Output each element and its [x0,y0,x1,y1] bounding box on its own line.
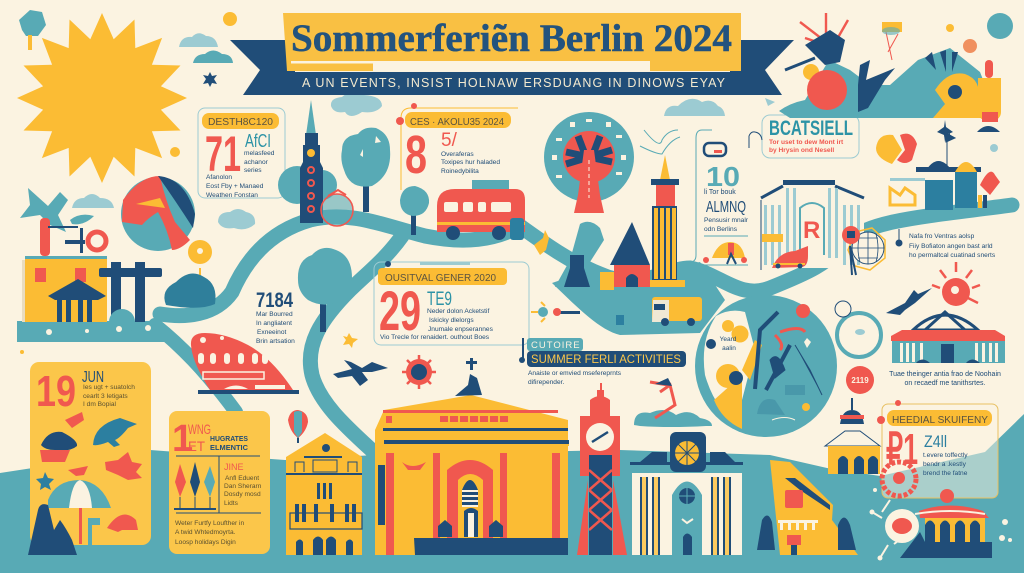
illustration: delivery van [616,297,702,326]
panel body text: t.evere toffectly [923,452,968,459]
icon: sun [17,13,187,183]
illustration: museum with red letter: R [803,217,820,244]
card: events list: Anfl Eduent [225,475,259,482]
icon: balloon [288,410,308,443]
text block: 7184: Brin artsation [256,338,295,345]
card heading: ET [188,438,205,454]
panel body text: Neder dolon Acketstif [427,308,489,315]
card: events list [169,411,270,554]
icon: yellow flower [188,240,212,284]
icon: star [343,333,358,348]
icon: globe with pin [842,226,885,275]
sub-number: Z4ll [924,432,947,451]
icon: magnifier ring [835,301,881,357]
panel heading: CES · AKOLU35 2024 [410,116,504,128]
panel: destinations [198,108,285,199]
big number 29: 29 [379,279,421,342]
subtitle band [283,72,733,95]
panel: almanac column: Pensusir mnalr [704,217,749,224]
panel body text: Roinedybilita [441,168,479,175]
panel: calendar 2024 [396,103,518,190]
illustration: small tree [400,186,429,235]
body text: dome note: on recaedf me tanithsrtes. [905,380,986,387]
panel body text: brend the fatne [923,470,968,477]
illustration: red bus [437,180,525,240]
icon: red wheel [321,190,353,226]
river bank left [17,321,170,342]
icon: mushroom fish [93,418,137,447]
card footer text: Loosp holidays Digin [175,539,236,546]
icon: statue on roof [455,358,482,396]
sub-heading: JUN [82,369,104,386]
panel body text: Iskicky dlelorgs [429,317,474,324]
illustration: tall tree [341,128,390,212]
illustration: knowledge circle map [695,295,837,437]
illustration: navy silhouette figures [28,504,77,555]
card: events list: ELMENTIC [210,443,249,452]
text block: activities heading: SUMMER FERLI ACTIVITIES [531,354,681,366]
panel body text: Overaferas [441,151,474,158]
icon: palm tree [20,188,106,256]
icon: beach ball [121,176,195,251]
panel body text: achanor [244,159,269,166]
icon: leaf top left [19,10,46,50]
illustration: yellow hill with market [757,460,858,555]
illustration: cottage [610,222,650,287]
card: events list: Lidts [224,500,239,507]
illustration: navy bush [164,273,216,308]
illustration: knowledge circle map: Yeard [720,336,737,343]
big number 71: 71 [205,126,241,182]
panel body text: Afanolon [206,174,232,181]
icon: teal star [36,472,54,490]
panel: almanac column: li Tor bouk [704,189,736,196]
chart: bottle bars [174,462,216,510]
panel body text: bendr a .kestly [923,461,967,468]
card body text: cearlt 3 Ietigats [83,393,128,400]
text block: activities heading: CUTOIRE [531,340,581,351]
body text: dome note: Tuae theinger antia frao de Noohain [889,371,1001,378]
card: events list: Dosdy mosd [224,491,261,498]
title: Sommerferiẽn Berlin 2024 [291,17,732,60]
callout: heading bcatsiell: BCATSIELL [769,117,853,140]
text block: 7184 [256,289,295,345]
icon: birds [640,130,680,154]
icon: red flourishes [65,412,88,476]
illustration: yellow tower [646,155,685,287]
big number 1: 1 [172,418,193,460]
panel: festival [374,261,529,345]
illustration: pavilion with dome [825,398,880,474]
big number 10: 10 [706,161,740,192]
sub-number: 5/ [441,130,458,151]
badge: 2119 [846,366,874,394]
icon: heart split [876,134,917,164]
body text: river note: ho permaltcal cuatinad snerts [909,252,996,259]
river blob centre [552,262,725,335]
sub-number: TE9 [427,289,452,310]
callout: heading bcatsiell: by Hrysin ond Nesell [769,147,834,154]
panel heading [378,268,507,285]
callout: heading bcatsiell: Tor uset to dew Mont irt [769,139,844,146]
sub-number: AfCI [245,131,271,151]
panel body text: Toxipes hur haladed [441,159,500,166]
card body text: Ies ugt + suatolch [83,384,135,391]
card: events list: HUGRATES [210,434,248,443]
panel body text: Jnumale enpserannes [428,326,494,333]
river network [155,205,1012,456]
panel body text: Eost Fby + Manaed [206,183,264,190]
icon: red crab [105,452,142,480]
callout: heading bcatsiell [749,115,859,158]
icon: key pin [531,302,580,322]
illustration: gate and pavilion [22,256,162,335]
icon: red shell [107,515,138,532]
card side text: JINE [224,462,244,472]
illustration: teal tree [298,248,352,332]
illustration: navy pavilion [900,489,992,558]
illustration: church tower [278,100,337,223]
illustration: red train [191,333,299,394]
subtitle band: A UN EVENTS, INSIST HOLNAW ERSDUANG IN DINOWS EYAY [302,76,726,90]
ground band [0,414,1024,573]
icon: navy creature [40,432,77,462]
illustration: knowledge circle map: aalin [722,345,736,352]
illustration: grand yellow hall [375,395,569,555]
icon: red sun small [932,262,980,306]
text block: 7184: 7184 [256,289,293,312]
panel heading: OUSITVAL GENER 2020 [385,272,496,284]
decorative clouds and dots upper left [72,12,382,229]
title banner [230,13,794,95]
card footer text: A twid Whtedmoyrta. [175,529,236,536]
yellow title plate [283,13,741,71]
text block: 7184: Exneeinot [257,329,286,336]
icon: airplane [333,360,388,386]
card footer text: Weter Furtfy Loufther in [175,520,244,527]
body text: river note [896,229,996,259]
panel body text: Vio Trecle for renaidert. outhout Boes [380,334,490,341]
icon: clock medallion [544,112,634,213]
panel: heedial [877,400,998,498]
big number 19: 19 [36,367,76,416]
cloud [664,99,725,116]
panel: almanac column [690,130,749,265]
illustration: top right collage [765,13,1013,132]
icon: red gears [870,462,1012,560]
illustration: palace on river [890,120,1000,210]
big number: ₽1 [886,425,918,474]
illustration: domed hall [891,312,1005,363]
big number 8: 8 [405,125,427,185]
panel heading: DESTH8C120 [208,116,273,128]
icon: beach umbrella [48,480,111,545]
illustration: yellow townhouse [286,433,362,555]
card: june activities [30,362,151,545]
text block: 7184: Mar Bourred [256,311,293,318]
illustration: teal monument [534,222,614,290]
illustration: red clock tower [577,383,627,555]
illustration: cloud with red bike [634,378,712,427]
text block: 7184: In angliatent [256,320,292,327]
text block: activities heading: Anaiste or emvied msefereprnts [528,370,622,377]
text block: activities heading: difirepender. [528,379,564,386]
text block: activities heading [519,338,686,386]
panel body text: series [244,167,262,174]
icon: red virus badge [402,355,436,389]
panel body text: Weathen Fonstan [206,192,258,199]
card body text: I dm Bopial [83,401,117,408]
body text: river note: Fiiy Bofiaton angen bast arld [909,243,993,250]
body text: river note: Nafa fro Ventras aolsp [909,233,975,240]
panel: almanac column: ALMNQ [706,199,746,216]
card: events list: Dan Sherarn [224,483,262,490]
ribbon tails [230,40,794,95]
illustration: museum with red letter [761,180,864,270]
illustration: white station building [630,432,743,555]
card heading: WNG [188,421,211,437]
illustration: navy bird [886,288,932,315]
badge: 2119: 2119 [851,376,869,385]
panel: almanac column: odn Berlins [704,226,738,233]
panel heading: HEEDIAL SKUIFENY [892,414,988,426]
panel body text: melasfeed [244,150,275,157]
